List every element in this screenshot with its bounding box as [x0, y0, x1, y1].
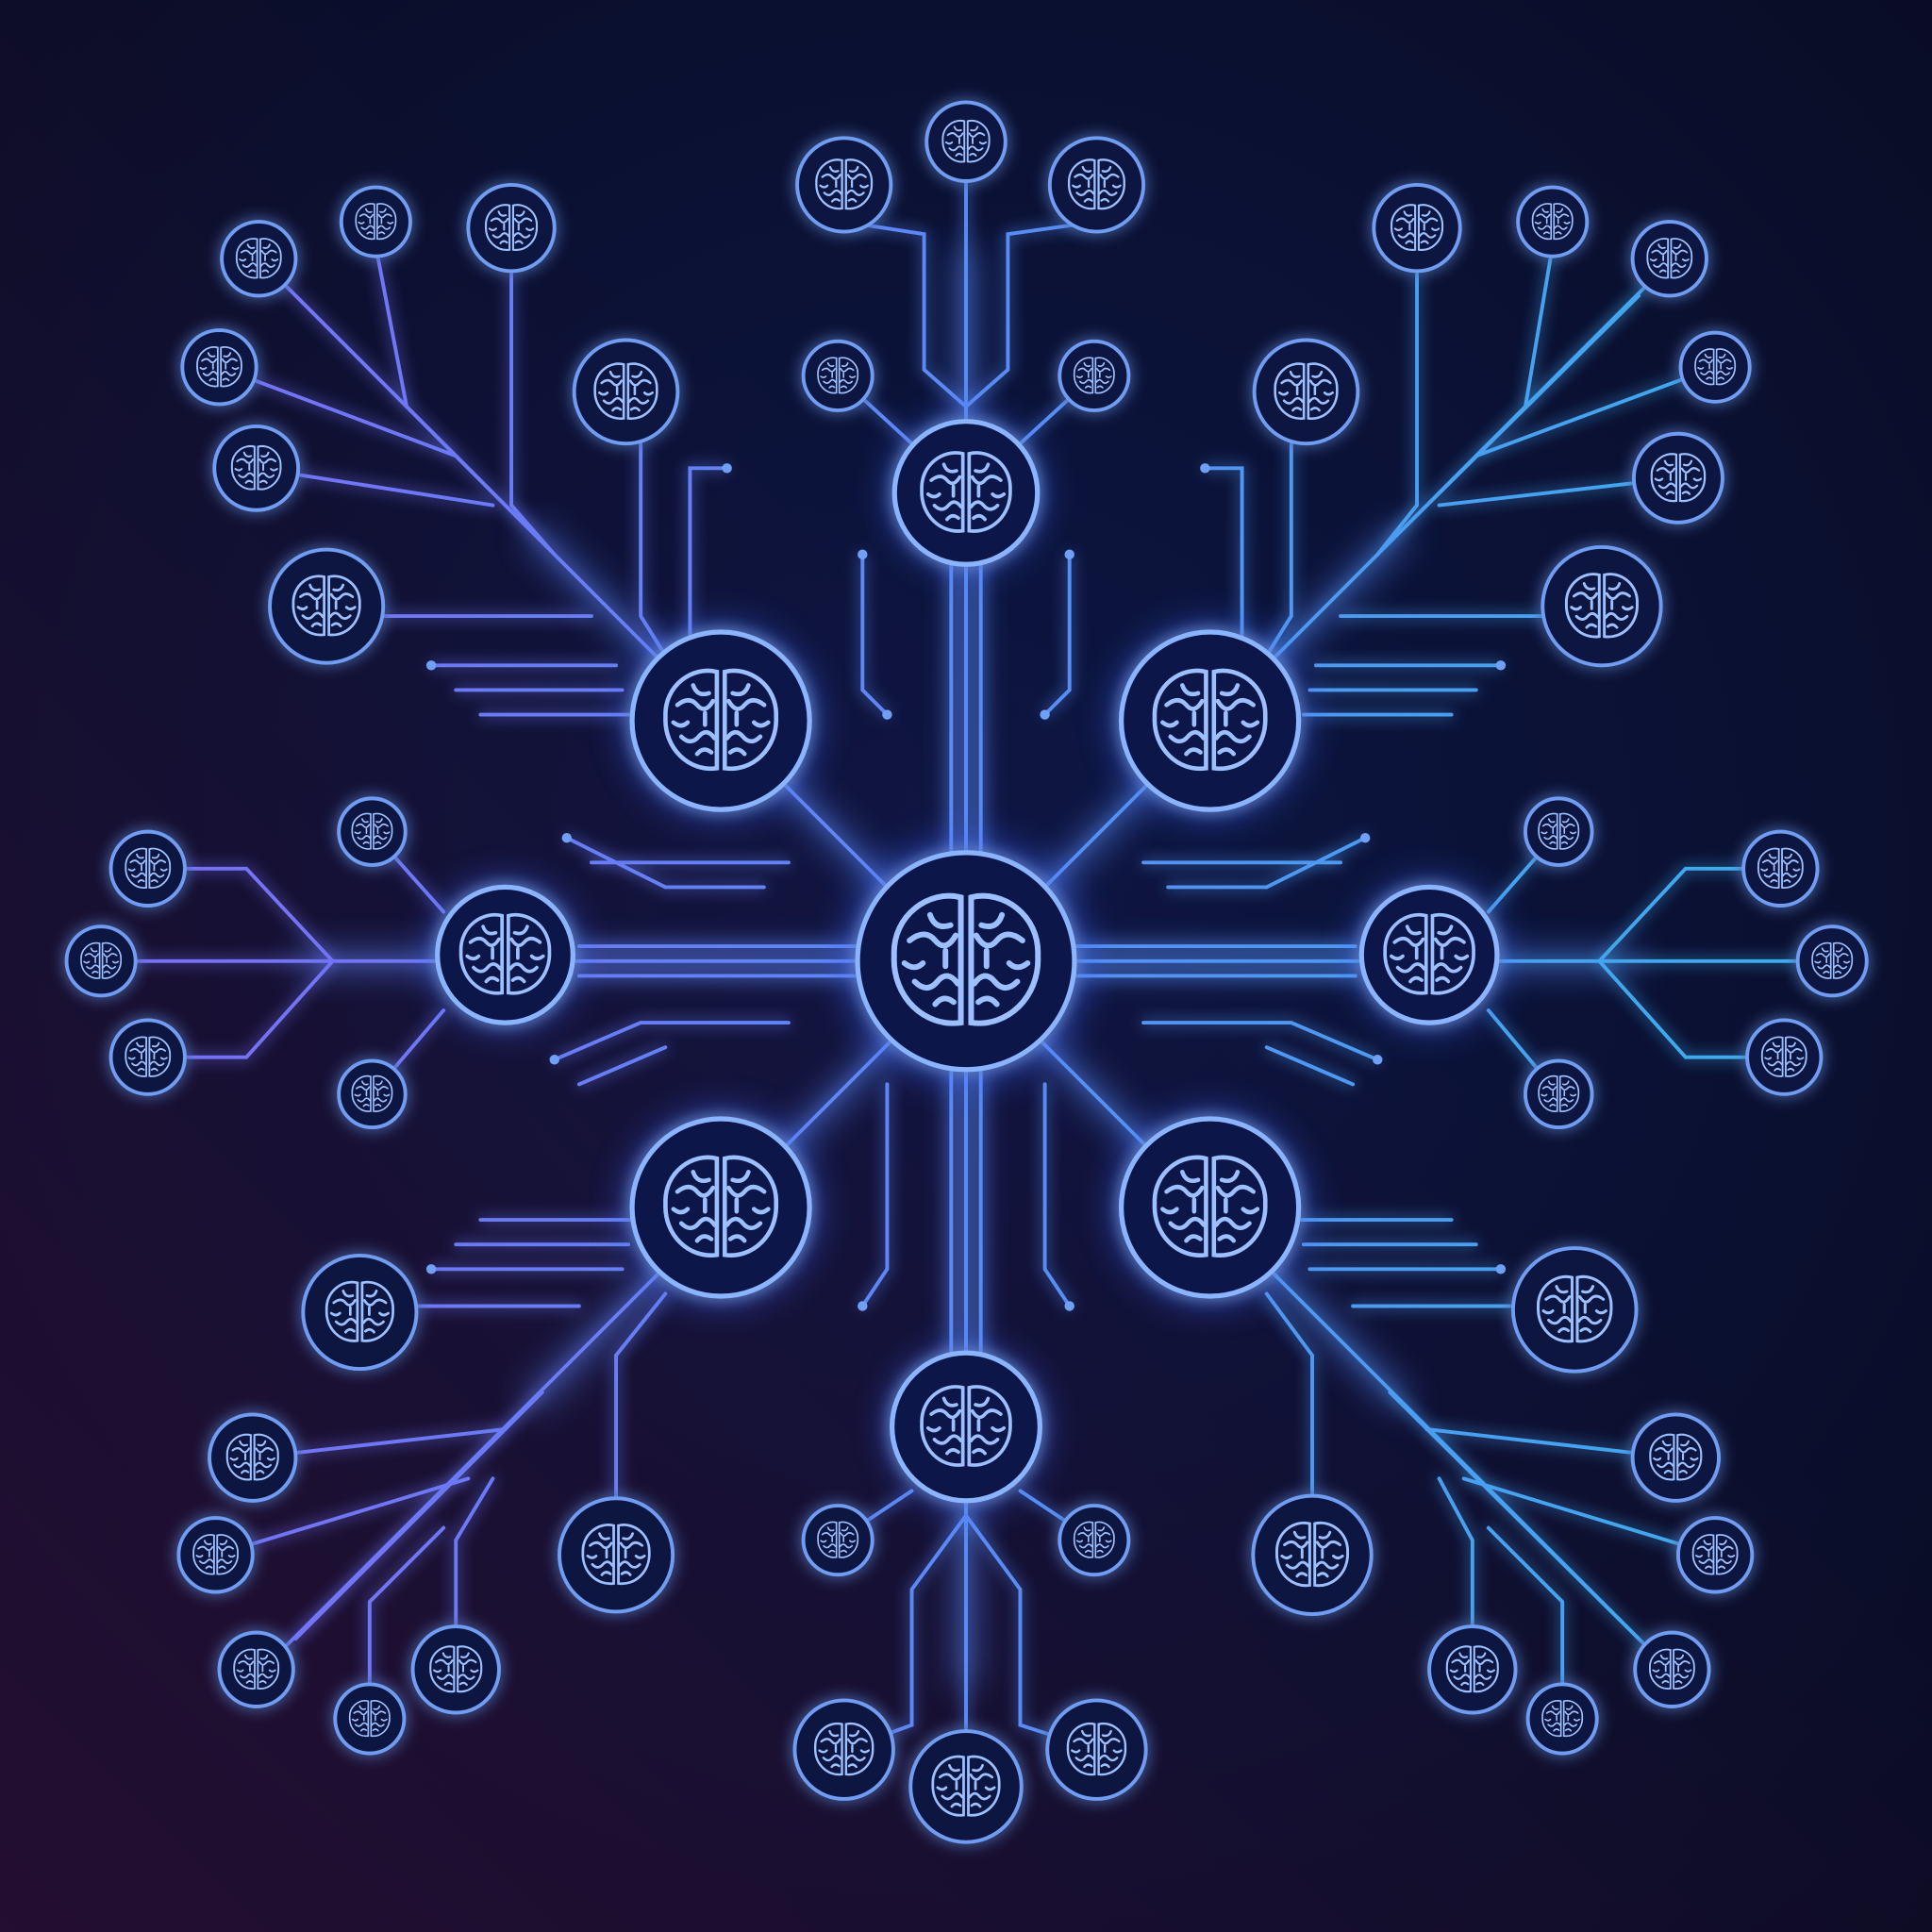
connection lines: [101, 142, 1832, 1787]
branches: top: [838, 222, 1096, 443]
branches: bottom-right: [1267, 1220, 1715, 1719]
branches: bottom: [838, 555, 1096, 1750]
main spokes: [101, 142, 1832, 1787]
branches: bottom-left: [216, 1220, 665, 1719]
node glow halos: [429, 414, 1506, 1508]
trace end dots: [426, 463, 1506, 1311]
glow halo: [295, 246, 1639, 1686]
branches: top-left: [219, 246, 727, 715]
inner brain nodes: [438, 422, 1497, 1501]
branches: left/right: [148, 832, 789, 1094]
branches: top-right: [1205, 246, 1715, 715]
